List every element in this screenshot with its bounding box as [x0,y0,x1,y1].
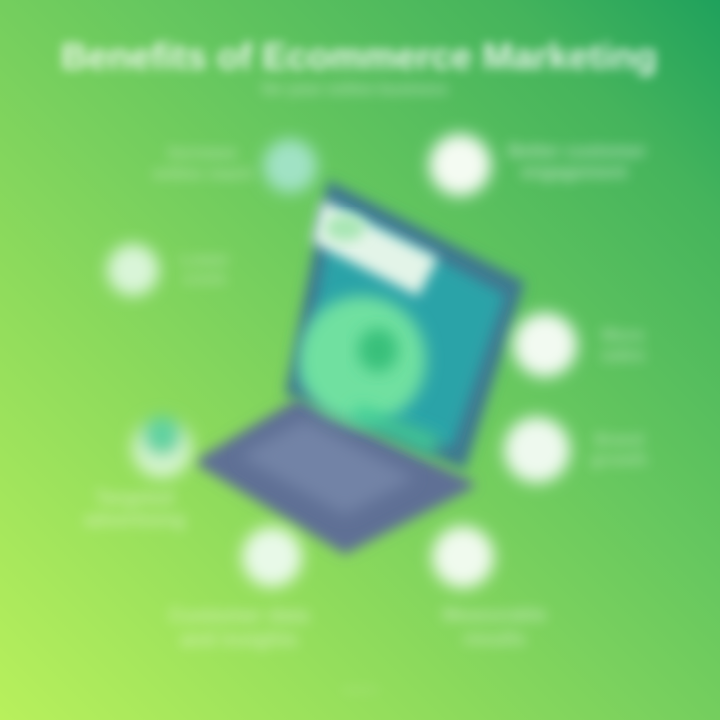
laptop keyboard [240,420,415,515]
icon: left [107,244,159,296]
laptop screen frame [285,180,525,470]
label: right upper [598,324,646,366]
screen header card [312,200,438,296]
header card accent [325,215,365,241]
label: right upper: More [601,325,644,345]
screen chart circle [298,296,426,424]
label: top left [152,143,253,184]
label: bottom left: and insights [180,629,298,651]
label: left: Lower [179,250,230,269]
subtitle: for your online business [262,81,448,98]
label: bottom right [439,604,548,650]
label: right lower: Brand [594,430,644,449]
label: left lower [82,487,188,533]
label: bottom left [166,605,312,654]
label: left lower: Targeted [95,488,174,509]
icon: right upper [513,313,577,377]
icon: top centre-left [263,139,317,193]
icon: bottom left [242,527,302,587]
label: right upper: sales [600,345,646,365]
laptop [200,180,525,550]
icon: left lower [132,416,192,478]
screen chart centre [358,328,398,372]
label: top right [504,139,648,186]
label: bottom left: Customer data [169,605,309,627]
icon: right lower [504,417,570,483]
icon: bottom right [432,526,494,588]
title: Benefits of Ecommerce Marketing [61,36,657,77]
label: top right: Better customer [508,141,646,161]
icon: top right [429,134,491,196]
label: left: costs [182,269,227,288]
label: left lower: advertising [84,510,185,531]
label: top left: Increase [168,143,237,162]
label: top right: engagement [521,162,627,182]
label: right lower: growth [591,450,647,469]
label: right lower [588,430,648,471]
label: bottom right: Measurable [442,605,547,626]
screen lower band [350,405,440,455]
footer: source [342,684,378,696]
label: bottom right: results [463,629,526,650]
label: left [179,250,230,288]
laptop screen [302,205,505,448]
label: top left: online reach [152,164,253,183]
laptop base [200,402,470,550]
